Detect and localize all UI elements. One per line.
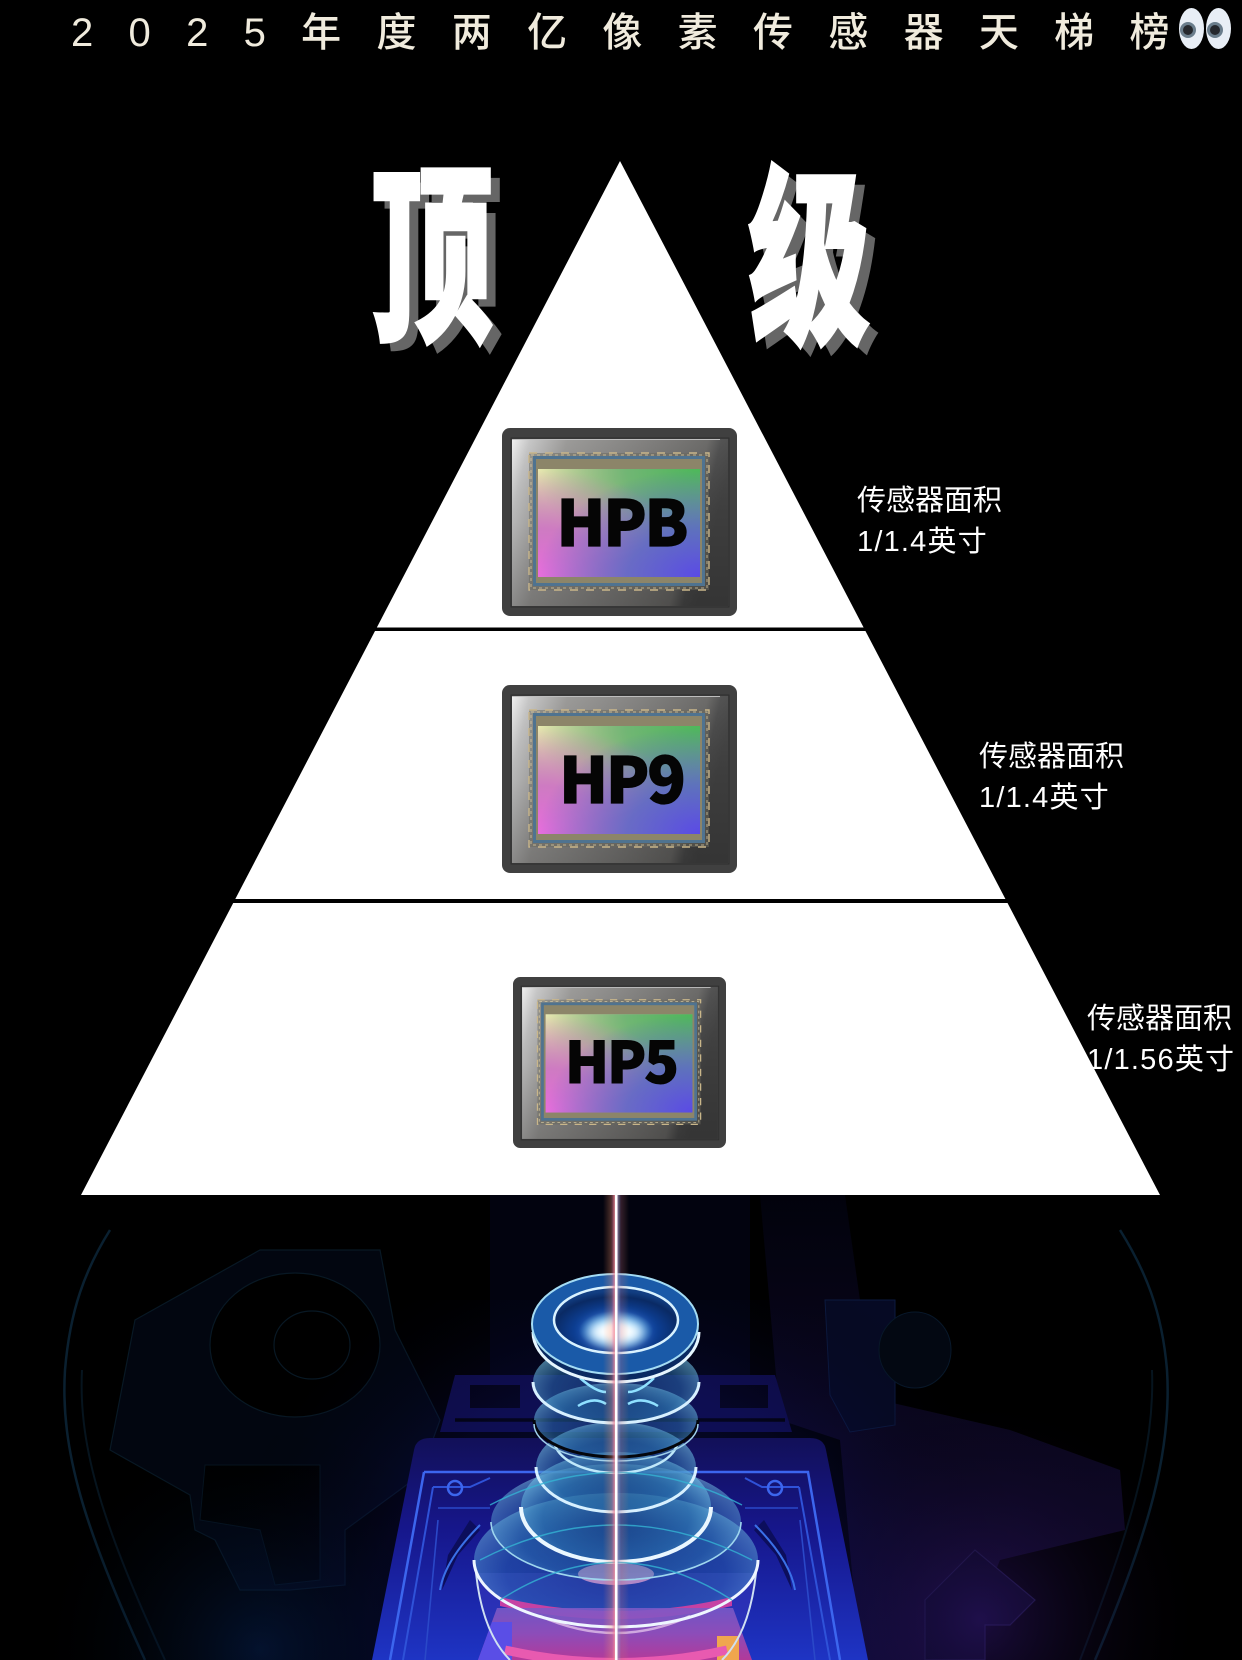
title: 2025年度两亿像素传感器天梯榜: [71, 11, 1205, 55]
tier divider 1: [372, 628, 868, 631]
label: HP9 sensor area: 1/1.4英寸: [979, 781, 1110, 814]
blue frame lines: [390, 1472, 840, 1660]
heading: 级: 级: [748, 107, 870, 385]
label: HPB sensor area: [857, 484, 1002, 558]
cyan arcs over lens: [480, 1472, 752, 1600]
blue base plate: [372, 1438, 868, 1660]
chip: HPB: HPB: [557, 474, 687, 565]
icon: eyes: [1179, 8, 1231, 49]
chip: HP5: HP5: [565, 1018, 677, 1100]
dark circuit panels: [110, 1195, 1125, 1660]
tier divider 2: [230, 899, 1010, 903]
label: HP9 sensor area: [979, 740, 1124, 814]
chip: HPB: [502, 428, 737, 616]
label: HPB sensor area: 传感器面积: [857, 484, 1002, 517]
pyramid body: [81, 161, 1160, 1195]
shaded voids beside lens: [442, 1520, 792, 1590]
label: HP5 sensor area: [1087, 1002, 1235, 1076]
large outer arc: [64, 1230, 1168, 1660]
chip: HP5: [513, 977, 726, 1148]
label: HP9 sensor area: 传感器面积: [979, 740, 1124, 773]
label: HPB sensor area: 1/1.4英寸: [857, 525, 988, 558]
pyramid: [81, 161, 1160, 1195]
chip: HP9: HP9: [559, 731, 684, 822]
light beam: [603, 1195, 629, 1660]
label: HP5 sensor area: 传感器面积: [1087, 1002, 1232, 1035]
heading: 顶: 顶: [381, 114, 503, 392]
ambient glows: [200, 1300, 1040, 1660]
heading: 顶: 顶: [371, 105, 493, 383]
label: HP5 sensor area: 1/1.56英寸: [1087, 1043, 1235, 1076]
heading: 级: 级: [758, 116, 880, 394]
lens stack: [474, 1274, 758, 1660]
purple sensor: [478, 1608, 752, 1660]
scene: lens and circuit artwork: [30, 1195, 1210, 1660]
chip: HP9: [502, 685, 737, 873]
